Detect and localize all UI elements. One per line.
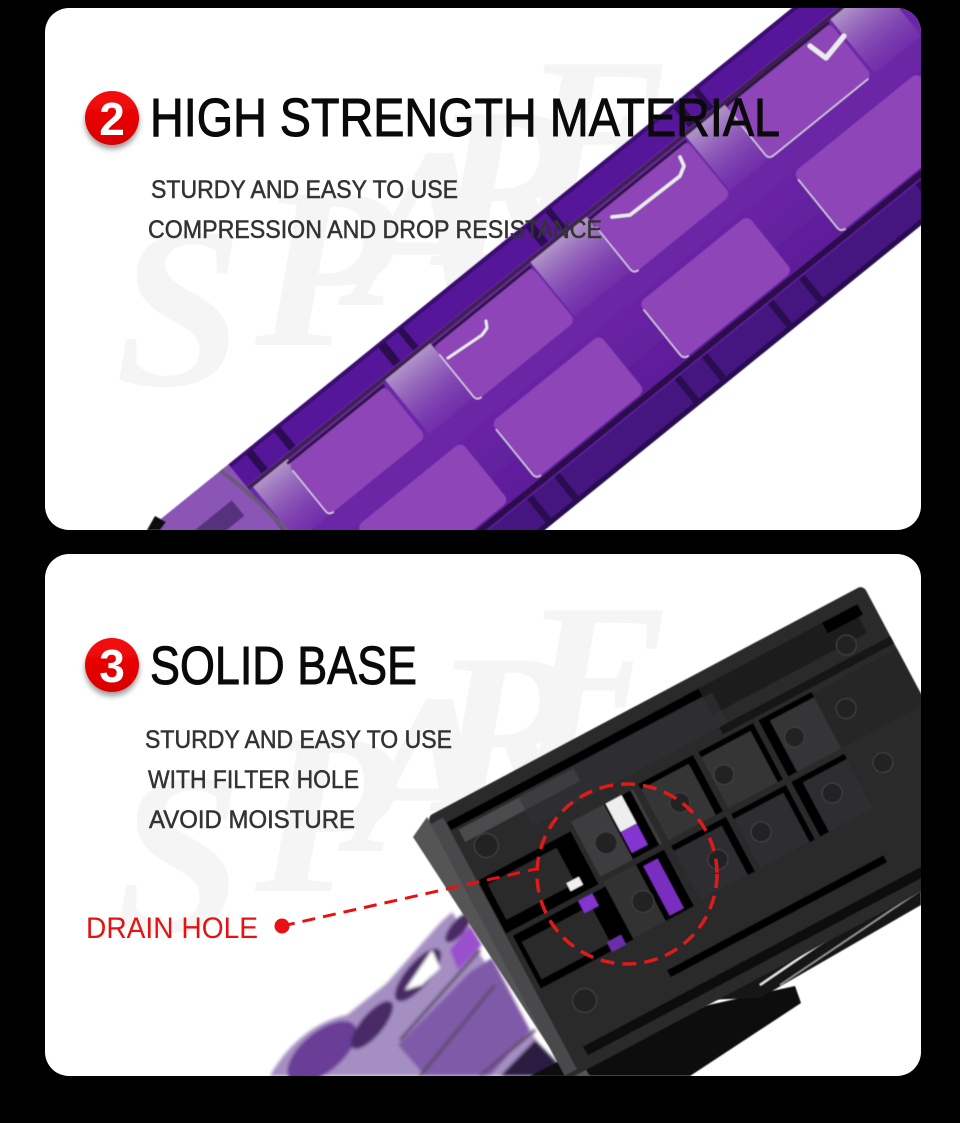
product photo: purple tube xyxy=(146,8,921,530)
rib lines xyxy=(719,636,894,734)
product photo: purple tube behind base xyxy=(269,910,566,1076)
heading: high strength material: HIGH STRENGTH MATERIAL xyxy=(150,88,780,148)
badge: number 3: 3 xyxy=(99,640,125,692)
window highlight edges xyxy=(292,78,870,515)
pins xyxy=(474,634,894,1014)
lighter translucent gaps in upper row xyxy=(253,0,921,541)
badge: number 3 xyxy=(85,638,139,692)
text: compression and drop resistance: COMPRESSION AND DROP RESISTANCE xyxy=(148,216,602,244)
top rail xyxy=(231,8,836,486)
label: drain hole: DRAIN HOLE xyxy=(86,912,258,945)
bottom rail xyxy=(489,181,921,530)
watermark brush lettering: SPARE xyxy=(115,556,673,981)
text: with filter hole: WITH FILTER HOLE xyxy=(148,766,359,794)
watermark brush lettering: SPARE xyxy=(115,10,673,435)
window dark edges xyxy=(285,21,831,465)
product photo: black base xyxy=(413,585,960,1080)
text: sturdy and easy to use: STURDY AND EASY TO USE xyxy=(145,726,452,754)
tube end section xyxy=(146,464,282,530)
black glossy fin xyxy=(530,891,921,1076)
black tube tip xyxy=(147,516,166,530)
bottom slot xyxy=(667,855,887,977)
heading: solid base: SOLID BASE xyxy=(150,636,417,696)
badge: number 2 xyxy=(85,91,139,145)
callout: drain hole leader line and circle xyxy=(274,784,717,964)
badge: number 2: 2 xyxy=(99,93,125,145)
panel: solid base xyxy=(45,554,960,1094)
left cavity xyxy=(478,831,599,934)
white window highlights xyxy=(448,36,844,358)
panel: high strength material xyxy=(45,8,921,530)
text: avoid moisture: AVOID MOISTURE xyxy=(149,806,355,834)
windows xyxy=(290,25,921,530)
cell column 2 xyxy=(571,789,662,877)
text: sturdy and easy to use: STURDY AND EASY TO USE xyxy=(151,176,458,204)
top slots xyxy=(447,689,703,830)
cell columns xyxy=(638,755,723,815)
